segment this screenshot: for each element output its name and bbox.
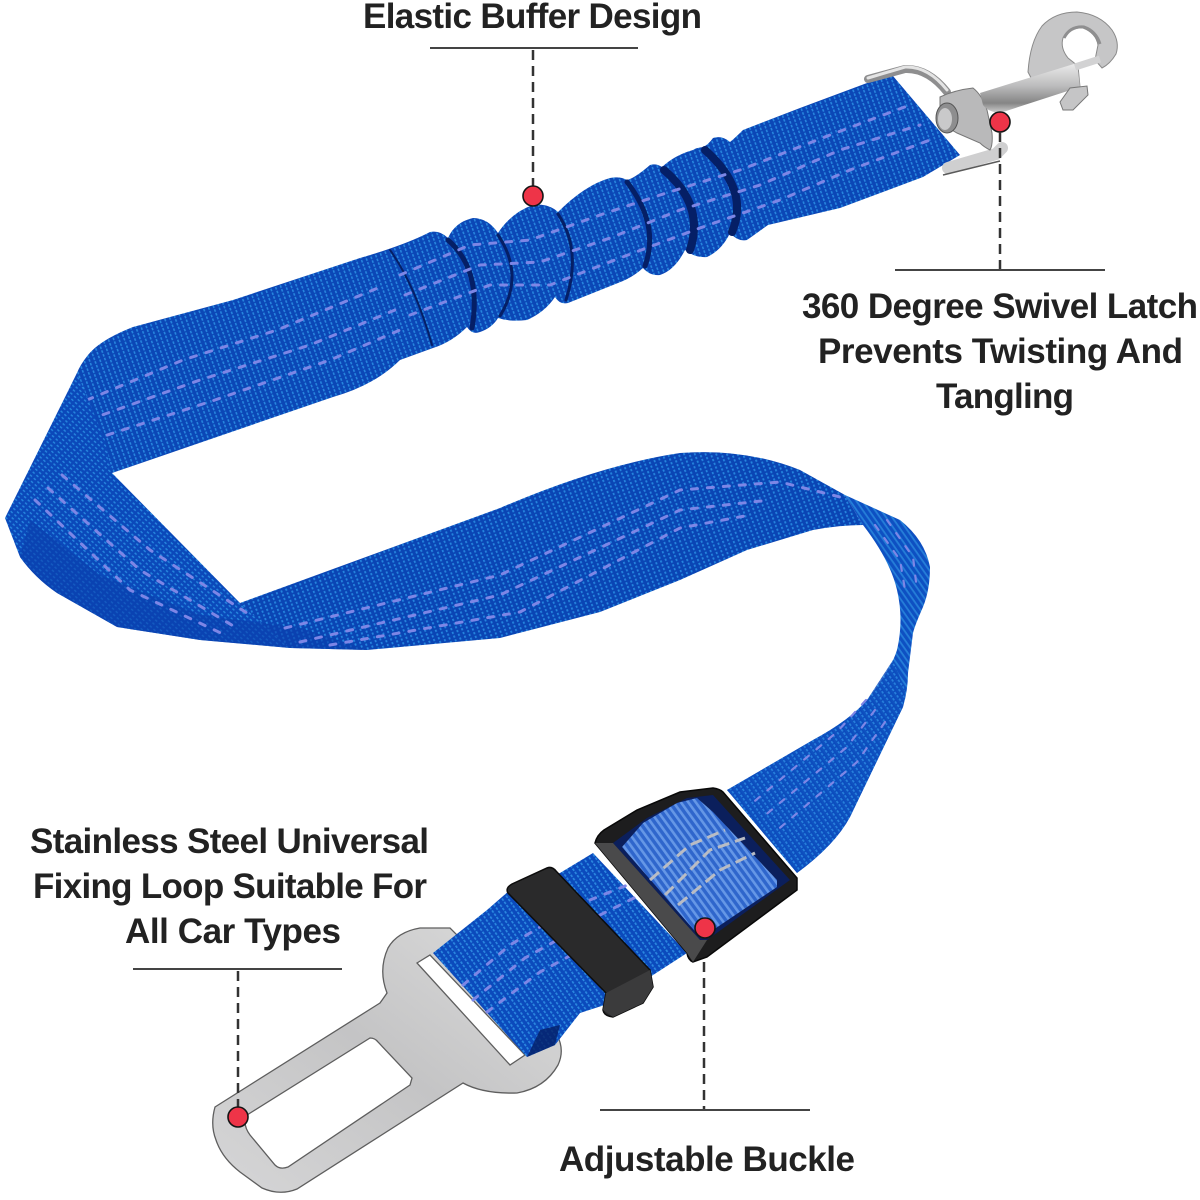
swivel plate (940, 88, 992, 150)
fold and long lower strap (5, 373, 863, 650)
elastic and upper strap (30, 76, 960, 520)
callout: swivel latch (802, 112, 1198, 416)
text block (30, 822, 429, 951)
marker dot (228, 1107, 248, 1127)
text block: Stainless Steel Universal (30, 822, 429, 861)
swivel rivet (936, 103, 958, 133)
metal buckle tongue (213, 928, 561, 1192)
fold stitching (35, 475, 840, 645)
buckle stitching (650, 830, 755, 905)
black keeper loop (507, 867, 653, 1017)
leader (237, 971, 239, 1107)
right strap bend down to adjuster (727, 495, 930, 873)
marker dot (695, 918, 715, 938)
text block: Fixing Loop Suitable For (33, 867, 427, 906)
thumb knob (1060, 86, 1088, 110)
text block: Tangling (936, 377, 1074, 416)
text block: 360 Degree Swivel Latch (802, 287, 1198, 326)
swivel snap hook (868, 12, 1117, 175)
leader (703, 962, 705, 1109)
rule (600, 1109, 810, 1111)
callout: elastic buffer design (363, 0, 702, 206)
hook barrel (980, 63, 1080, 113)
text block: All Car Types (125, 912, 341, 951)
rule (895, 269, 1105, 271)
upper strap stitching (87, 105, 930, 440)
rule (430, 47, 638, 49)
text block: Prevents Twisting And (818, 332, 1183, 371)
marker dot (523, 186, 543, 206)
gate pin (1075, 59, 1100, 67)
text block (802, 287, 1198, 416)
bottom strap (433, 853, 687, 1057)
marker dot (990, 112, 1010, 132)
callout: adjustable buckle (559, 918, 855, 1179)
callout: universal fixing loop (30, 822, 429, 1127)
bottom strap stitching (463, 880, 650, 1012)
black adjustable buckle (595, 788, 797, 962)
rule (133, 968, 342, 970)
right strap stitching (750, 520, 917, 832)
buckle window (613, 795, 790, 940)
heading: Adjustable Buckle (559, 1140, 855, 1179)
leader (999, 132, 1001, 269)
elastic gathers (390, 150, 737, 345)
D ring (868, 69, 947, 92)
hook head (1028, 12, 1117, 95)
strap through buckle (622, 798, 777, 937)
leader (532, 50, 534, 186)
